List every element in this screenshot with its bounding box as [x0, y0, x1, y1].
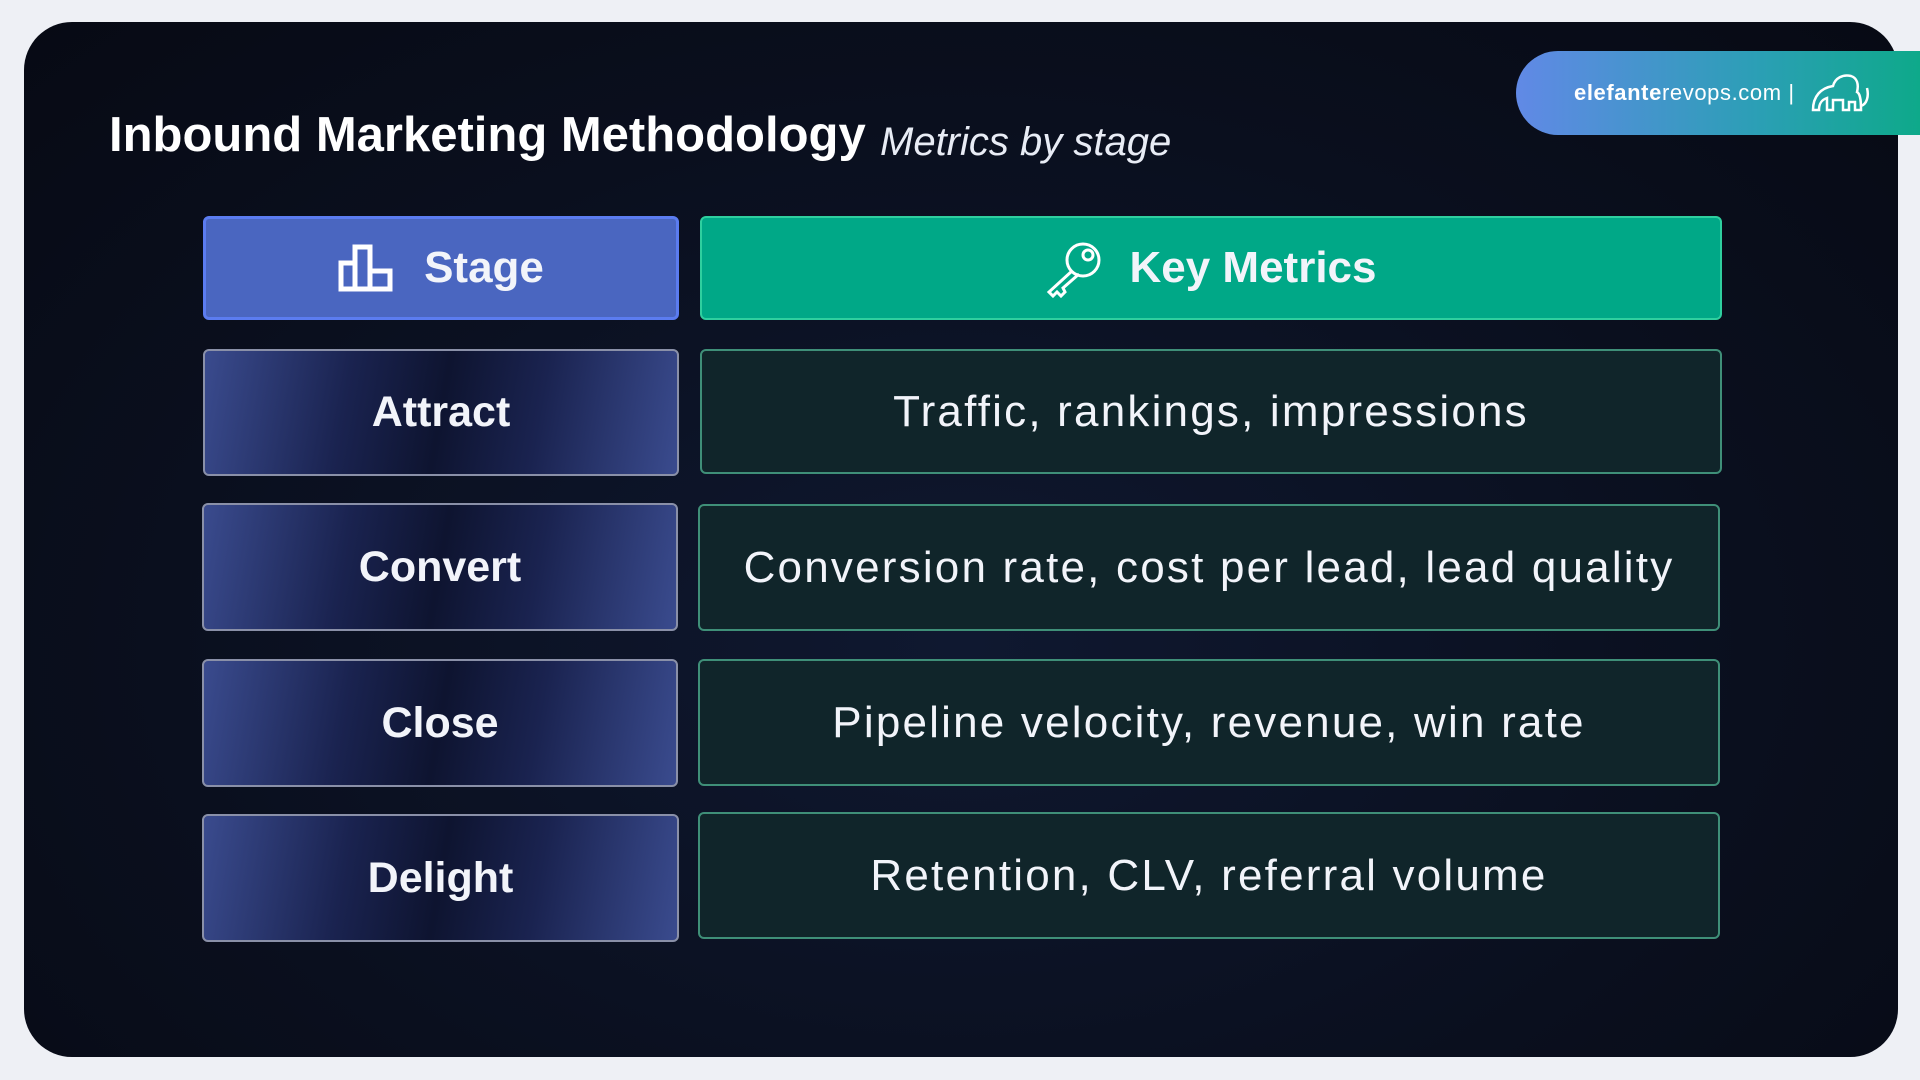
icon: bar chart: [338, 244, 392, 292]
row: delight stage: [202, 814, 679, 942]
row: delight metrics: [698, 812, 1720, 939]
row: close metrics: Pipeline velocity, revenue, win rate: [832, 698, 1586, 746]
row: attract metrics: Traffic, rankings, impressions: [893, 386, 1529, 436]
row: attract stage: Attract: [372, 388, 510, 436]
subtitle: Metrics by stage: [880, 120, 1171, 164]
header: stage: [203, 216, 679, 320]
logo pill: elefanterevops.com |: [1574, 80, 1795, 105]
header: key metrics: Key Metrics: [1129, 243, 1376, 292]
logo pill: [1516, 51, 1920, 135]
row: attract metrics: [700, 349, 1722, 474]
row: convert metrics: [698, 504, 1720, 631]
row: convert stage: Convert: [359, 542, 521, 590]
header: key metrics: [700, 216, 1722, 320]
header: stage: Stage: [424, 243, 544, 292]
icon: key: [1046, 242, 1100, 298]
row: close metrics: [698, 659, 1720, 786]
title: Inbound Marketing Methodology: [109, 108, 866, 162]
row: close stage: [202, 659, 678, 787]
row: attract stage: [203, 349, 679, 476]
row: delight metrics: Retention, CLV, referral volume: [870, 850, 1548, 900]
icon: elephant: [1812, 74, 1869, 112]
row: convert metrics: Conversion rate, cost per lead, lead quality: [744, 542, 1674, 592]
row: delight stage: Delight: [368, 854, 513, 902]
row: close stage: Close: [381, 698, 499, 746]
row: convert stage: [202, 503, 678, 631]
